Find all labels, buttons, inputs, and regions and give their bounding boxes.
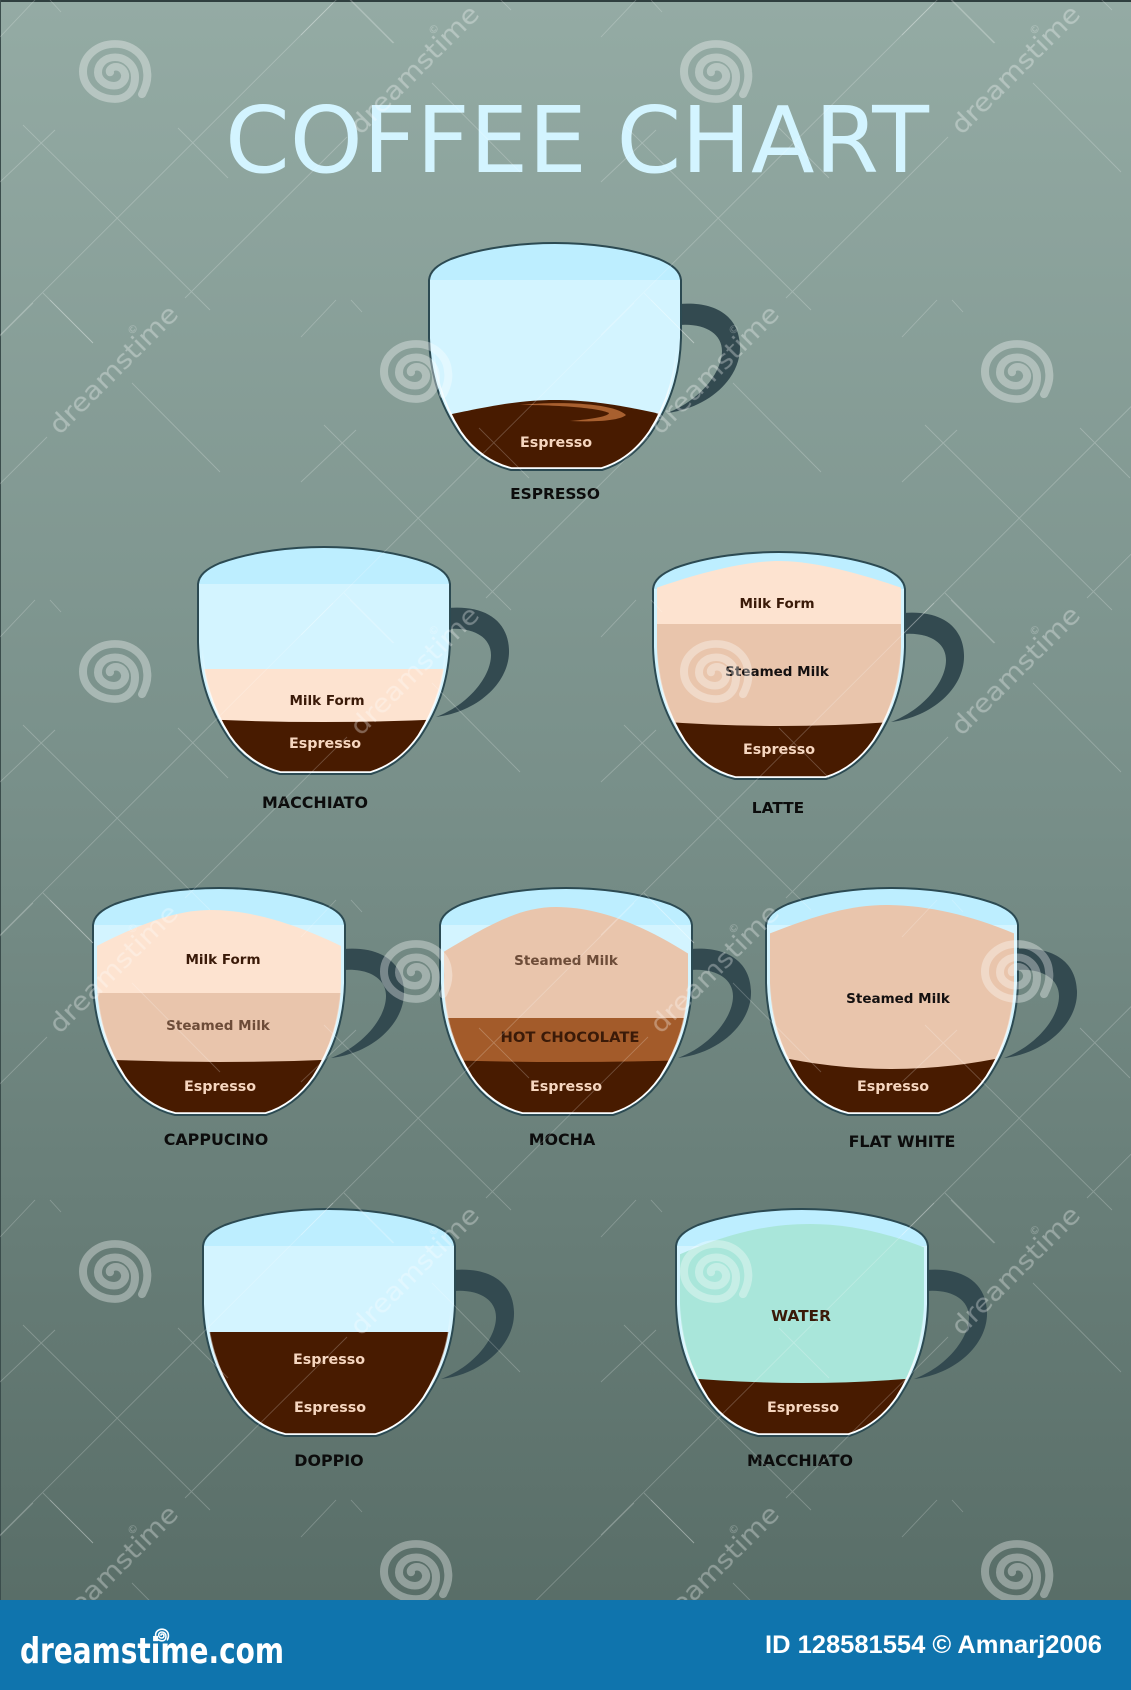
panel: water and espresso cup: MACCHIATO xyxy=(747,1451,853,1470)
watermark text: © xyxy=(124,321,141,338)
footer bar xyxy=(0,1600,1131,1690)
panel: flat white cup xyxy=(766,888,1077,1151)
panel: mocha cup: Steamed Milk xyxy=(514,953,619,969)
watermark text: © xyxy=(1026,21,1043,38)
title: COFFEE CHART xyxy=(225,87,930,194)
panel: latte cup: LATTE xyxy=(752,799,804,817)
watermark text: dreamstime xyxy=(945,600,1087,742)
watermark text: dreamstime xyxy=(644,1499,786,1641)
panel: cappuccino cup: Milk Form xyxy=(185,952,261,968)
footer logo: dreamstime.com xyxy=(20,1631,284,1672)
panel: doppio cup: Espresso xyxy=(293,1352,365,1368)
panel: latte cup: Steamed Milk xyxy=(725,664,830,680)
watermark text: dreamstime xyxy=(644,299,786,441)
panel: cappuccino cup: Steamed Milk xyxy=(166,1018,271,1034)
watermark text: © xyxy=(1026,1222,1043,1239)
panel: water and espresso cup xyxy=(676,1209,987,1470)
watermark text: © xyxy=(725,920,742,937)
panel: latte cup xyxy=(653,552,964,817)
watermark text: © xyxy=(425,1222,442,1239)
watermark text: dreamstime xyxy=(344,1200,486,1342)
panel: mocha cup: HOT CHOCOLATE xyxy=(500,1030,640,1046)
panel: mocha cup: MOCHA xyxy=(529,1130,596,1149)
icon: logo spiral xyxy=(156,1629,168,1641)
panel: macchiato cup: Milk Form xyxy=(289,693,365,709)
watermark text: dreamstime xyxy=(43,898,185,1040)
watermark text: © xyxy=(1026,622,1043,639)
panel: macchiato cup: Espresso xyxy=(289,736,361,752)
panel: cappuccino cup: CAPPUCINO xyxy=(164,1130,268,1149)
watermark text: dreamstime xyxy=(43,1499,185,1641)
panel: flat white cup: Steamed Milk xyxy=(846,991,951,1007)
panel: flat white cup: FLAT WHITE xyxy=(849,1132,955,1151)
panel: macchiato cup: MACCHIATO xyxy=(262,793,368,812)
watermark text: © xyxy=(725,321,742,338)
watermark text: dreamstime xyxy=(43,299,185,441)
panel: doppio cup: Espresso xyxy=(294,1400,366,1416)
watermark text: © xyxy=(425,622,442,639)
watermark text: © xyxy=(124,920,141,937)
image id credit: ID 128581554 © Amnarj2006 xyxy=(765,1631,1102,1659)
panel: mocha cup xyxy=(440,888,751,1149)
watermark text: dreamstime xyxy=(344,600,486,742)
panel: espresso cup: Espresso xyxy=(520,435,592,451)
panel: water and espresso cup: WATER xyxy=(771,1307,831,1325)
panel: latte cup: Milk Form xyxy=(739,596,815,612)
panel: latte cup: Espresso xyxy=(743,742,815,758)
watermark text: © xyxy=(124,1521,141,1538)
panel: espresso cup: ESPRESSO xyxy=(510,485,600,503)
panel: cappuccino cup xyxy=(93,888,404,1149)
panel: doppio cup xyxy=(203,1209,514,1470)
panel: water and espresso cup: Espresso xyxy=(767,1400,839,1416)
watermark text: dreamstime xyxy=(945,1200,1087,1342)
watermark text: dreamstime xyxy=(344,0,486,141)
panel: flat white cup: Espresso xyxy=(857,1079,929,1095)
panel: doppio cup: DOPPIO xyxy=(294,1451,364,1470)
panel: mocha cup: Espresso xyxy=(530,1079,602,1095)
watermark text: © xyxy=(425,21,442,38)
watermark text: © xyxy=(725,1521,742,1538)
panel: cappuccino cup: Espresso xyxy=(184,1079,256,1095)
watermark text: dreamstime xyxy=(945,0,1087,141)
panel: macchiato cup xyxy=(198,547,509,812)
panel: espresso cup xyxy=(429,243,740,503)
watermark text: dreamstime xyxy=(644,898,786,1040)
